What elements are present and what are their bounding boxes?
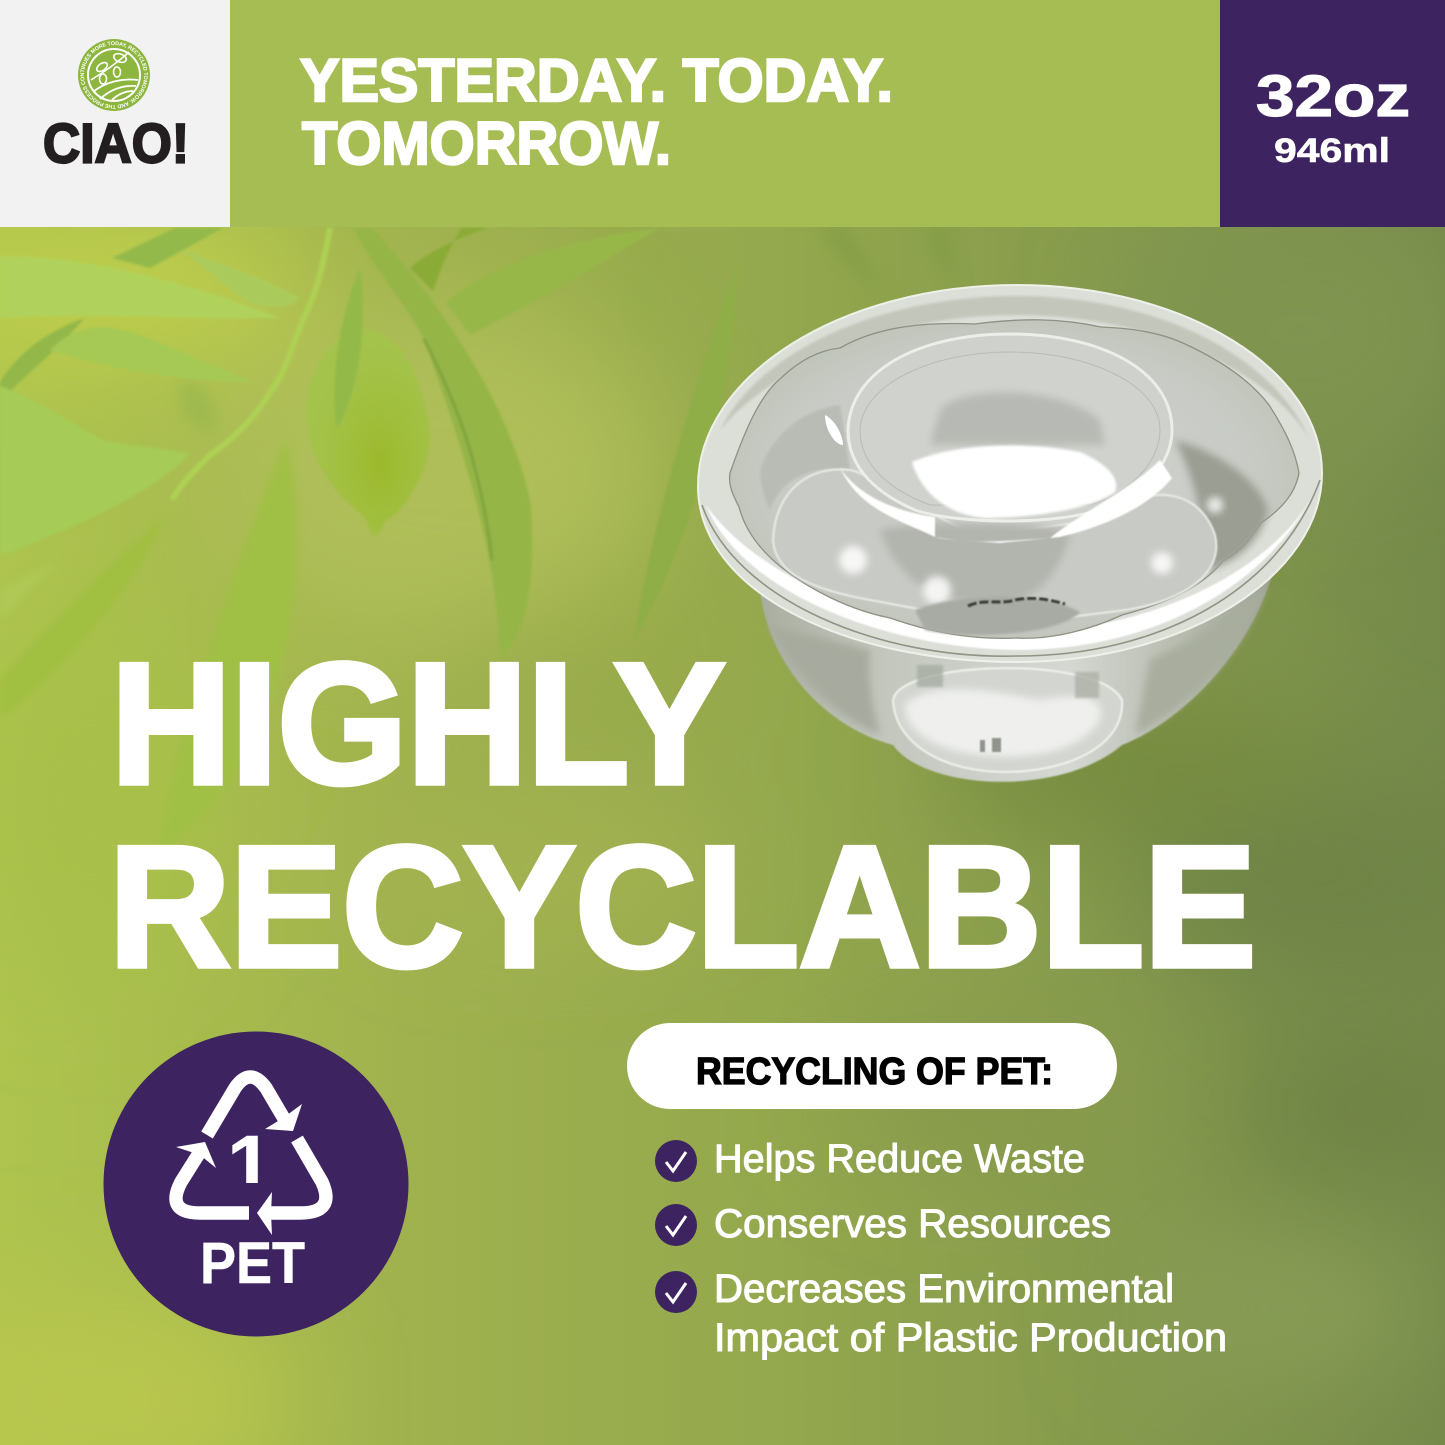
lid dome <box>730 320 1299 638</box>
item: conserves resources: Conserves Resources <box>714 1202 1111 1246</box>
header tagline: TOMORROW. <box>302 110 671 177</box>
panel: recycling benefits <box>627 1023 1227 1360</box>
base shadow flecks <box>915 597 1080 635</box>
pill heading <box>627 1023 1117 1109</box>
header tagline: YESTERDAY. TODAY. <box>300 47 893 114</box>
item: decreases environmental impact: Decreases Environmental <box>714 1267 1174 1311</box>
icon: recycling triangle <box>176 1077 326 1235</box>
leaves and olive <box>0 228 957 852</box>
size badge: 946ml <box>1274 132 1390 170</box>
dome well <box>848 334 1172 521</box>
header band <box>230 0 1220 227</box>
badge: PET recycling code 1: 1 <box>227 1118 273 1212</box>
item: decreases environmental impact <box>655 1267 1227 1360</box>
badge: PET recycling code 1 <box>104 1032 408 1336</box>
logo wordmark: CIAO! <box>43 112 189 174</box>
size badge <box>1220 0 1445 227</box>
headline: HIGHLY <box>111 628 725 820</box>
lobes <box>773 469 1216 625</box>
pill heading: RECYCLING OF PET: <box>696 1051 1053 1093</box>
headline: RECYCLABLE <box>109 811 1256 1003</box>
panel: logo <box>0 0 230 227</box>
product photo: clear PET bowl with dome lid <box>698 285 1322 782</box>
size badge: 32oz <box>1256 64 1410 129</box>
item: decreases environmental impact: Impact of Plastic Production <box>714 1316 1227 1360</box>
badge: PET recycling code 1: PET <box>200 1231 305 1296</box>
icon: olive branch seal: MORE TODAY, RECYCLED TOMORROW. AND THE PROCESS CONTINUES <box>80 41 148 109</box>
bowl body <box>760 575 1272 782</box>
item: helps reduce waste: Helps Reduce Waste <box>714 1137 1085 1181</box>
lid rim <box>698 285 1322 662</box>
white highlights <box>912 445 1116 518</box>
